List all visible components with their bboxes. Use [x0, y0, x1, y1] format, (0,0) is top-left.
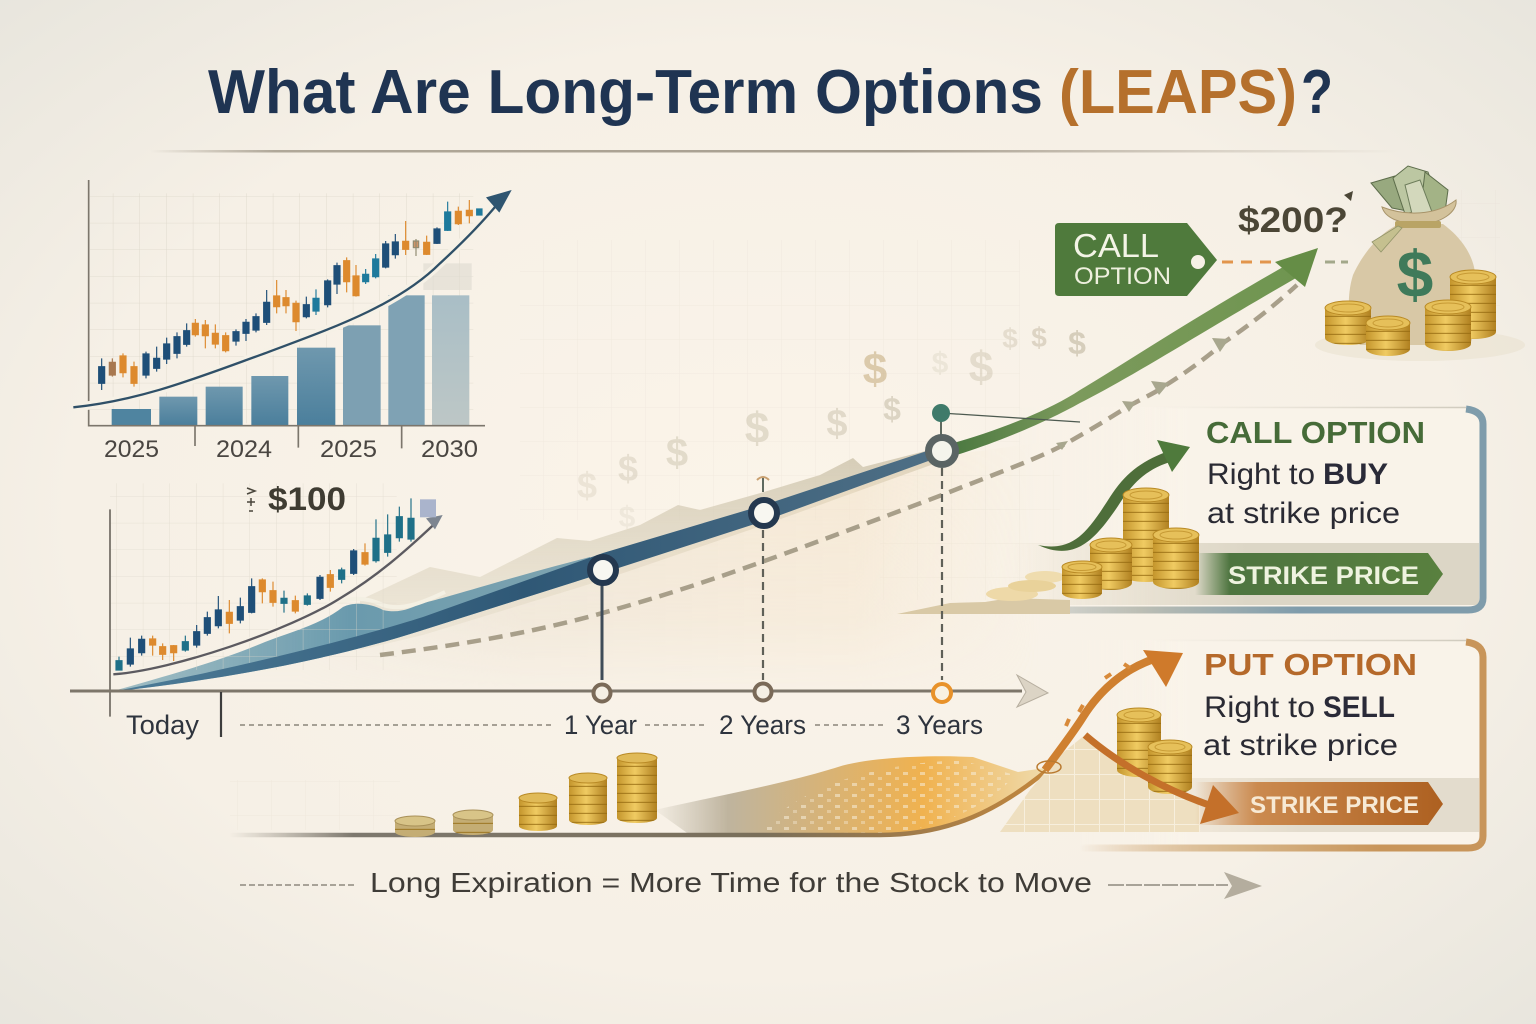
icon: money bag: $ [1397, 237, 1433, 311]
axis marker [107, 509, 112, 717]
main line [110, 446, 942, 692]
text: call option: BUY [1323, 458, 1388, 491]
white edge over the area [340, 592, 445, 607]
price label: $100: $100 [268, 481, 346, 517]
timeline labels: Today [126, 710, 199, 740]
timeline labels: 1 Year [564, 710, 637, 740]
title: ? [1301, 58, 1333, 127]
lower base: golden hill and coins [230, 756, 1051, 835]
ground strip and pale coins [897, 571, 1070, 614]
text: put option: SELL [1323, 691, 1395, 724]
target price: $200?: $200? [1238, 201, 1348, 240]
banner: strike price [1195, 553, 1443, 595]
chart: lower candlesticks [110, 483, 443, 717]
coin stacks: growth row [395, 753, 657, 837]
background grid [230, 190, 1500, 830]
arrow: orange up and down [1037, 650, 1239, 824]
banner: strike price [1195, 782, 1443, 825]
text: call option [1206, 415, 1425, 530]
floating dollar signs: $ [1068, 325, 1086, 361]
icon: money bag [1315, 166, 1525, 361]
caption with arrow [240, 867, 1262, 899]
dashed strike connector [1222, 260, 1276, 264]
main trajectory: projected dashed path [380, 285, 1297, 655]
year labels: 2025 [320, 436, 377, 463]
growth curve [73, 205, 497, 407]
target price: $200? [1238, 191, 1353, 240]
text: call option: Right to [1207, 458, 1315, 491]
curve [113, 525, 433, 674]
floating dollar signs: $ [666, 431, 688, 475]
text: put option: at strike price [1203, 729, 1398, 762]
caption with arrow: Long Expiration = More Time for the Stock to Move [370, 867, 1092, 898]
text: put option: PUT OPTION [1204, 647, 1417, 682]
bars [112, 263, 472, 425]
panel: call option [897, 407, 1483, 614]
year labels: 2024 [216, 436, 272, 463]
call option price tag: CALL [1073, 227, 1159, 264]
blue area under the line [110, 557, 590, 692]
call option price tag [1055, 223, 1217, 296]
timeline axis [70, 675, 1048, 737]
floating dollar signs: $ [618, 448, 638, 489]
title: What Are Long-Term Options [208, 58, 1043, 127]
floating dollar signs: $ [883, 391, 901, 427]
timeline nodes [590, 404, 1080, 680]
candles [116, 498, 414, 670]
panel: put option [1000, 640, 1483, 848]
chart: upper candlesticks and bars [73, 180, 512, 448]
banner: strike price: STRIKE PRICE [1250, 792, 1419, 819]
timeline labels [126, 710, 983, 740]
year labels: 2025 [104, 436, 159, 463]
green growth arrow [950, 248, 1318, 457]
coin stacks beside bag [1325, 270, 1496, 356]
floating dollar signs: $ [745, 404, 769, 453]
hills behind main line [360, 451, 952, 652]
text: call option: at strike price [1207, 497, 1400, 530]
year labels [104, 436, 478, 463]
floating dollar signs: $ [932, 347, 949, 380]
floating dollar signs: $ [577, 465, 597, 506]
text: call option: CALL OPTION [1206, 415, 1425, 450]
timeline labels: 3 Years [896, 710, 983, 740]
text: put option [1203, 647, 1417, 762]
floating dollar signs [577, 322, 1086, 534]
floating dollar signs: $ [1031, 322, 1047, 353]
year labels: 2030 [421, 436, 478, 463]
banner: strike price: STRIKE PRICE [1228, 562, 1419, 590]
timeline labels: 2 Years [719, 710, 806, 740]
floating dollar signs: $ [863, 345, 887, 394]
axes [89, 180, 485, 448]
floating dollar signs: $ [619, 501, 636, 534]
floating dollar signs: $ [826, 403, 848, 445]
coins: call panel [1062, 488, 1199, 599]
floating dollar signs: $ [969, 343, 993, 392]
text: put option: Right to [1204, 691, 1315, 724]
candlesticks [99, 200, 482, 390]
arrow: call curve [1038, 440, 1190, 551]
call option price tag: OPTION [1074, 263, 1171, 290]
title: (LEAPS) [1059, 58, 1297, 127]
coins: put panel [1117, 708, 1192, 794]
floating dollar signs: $ [1002, 323, 1018, 354]
